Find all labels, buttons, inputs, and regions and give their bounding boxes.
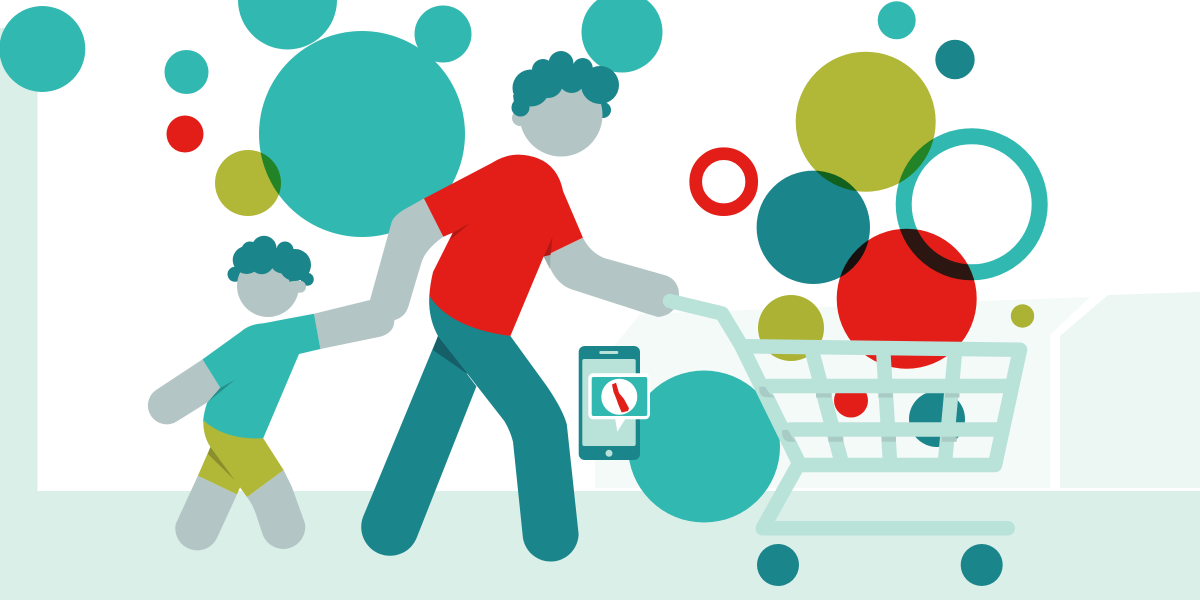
arm: left [148,359,220,424]
circle: olive left [215,150,281,216]
leg: right [247,470,305,549]
wheel left [757,544,799,586]
ring: teal [904,136,1040,272]
head [237,255,306,317]
hair lock behind head [595,102,611,118]
circle: olive tiny [1011,304,1034,328]
upright two [883,352,890,462]
shirt shadow: right [544,237,552,257]
torso: red shirt [424,155,583,336]
head [512,74,602,156]
icon: bottle [612,383,629,412]
circle: dark teal small top right [935,40,975,79]
circle: teal behind head [582,0,662,72]
ring: red [696,154,752,210]
leg: left [175,476,237,550]
circle: teal small top right [878,1,916,39]
circle: olive large [796,52,936,192]
torso: teal shirt [202,314,320,438]
back leg shadow [433,336,470,376]
home button [606,450,612,457]
arm: reaching to child [370,198,443,320]
circle: teal top [238,0,337,50]
hair locks behind head [228,267,314,286]
circle: red small left [166,116,204,152]
phone body [579,346,640,460]
circle: teal top left [0,6,85,92]
hair [512,51,619,116]
phone screen [582,359,636,446]
rail middle [768,379,1006,393]
circle: teal large [259,31,465,237]
bubbles: overlapping circles [0,0,1040,522]
shorts shadow [208,447,235,480]
speech bubble [588,373,650,432]
shirt shadow: left [450,223,470,240]
back leg [361,336,476,556]
circle: teal small left [164,50,208,94]
arm: pushing cart [544,238,679,317]
circle: red large [837,229,977,369]
icon: smartphone [579,346,650,460]
figure: adult [361,51,679,562]
shorts [198,420,284,497]
speaker [599,351,618,354]
handle and side [670,301,799,463]
figure: child [148,236,395,550]
rail lower [790,422,1000,437]
circle: olive behind cart [758,295,824,361]
basket outline [745,346,1020,465]
circle: dark teal in cart [909,391,965,447]
arm: holding hand [314,300,395,349]
upright three [945,352,955,462]
front leg [429,296,579,562]
circle: dark teal large [757,171,870,284]
circle: teal upper [414,6,472,62]
arm shadow [544,255,550,269]
cart shadows [759,387,960,442]
shopping cart [670,301,1020,586]
wheel right [961,544,1003,586]
circle: teal large lower [628,370,780,522]
shirt shadow [208,380,235,402]
upright one [812,350,841,460]
lower frame [763,467,1008,528]
circle: red in cart [834,384,868,418]
cart frame [670,301,1020,528]
hair [233,236,311,282]
